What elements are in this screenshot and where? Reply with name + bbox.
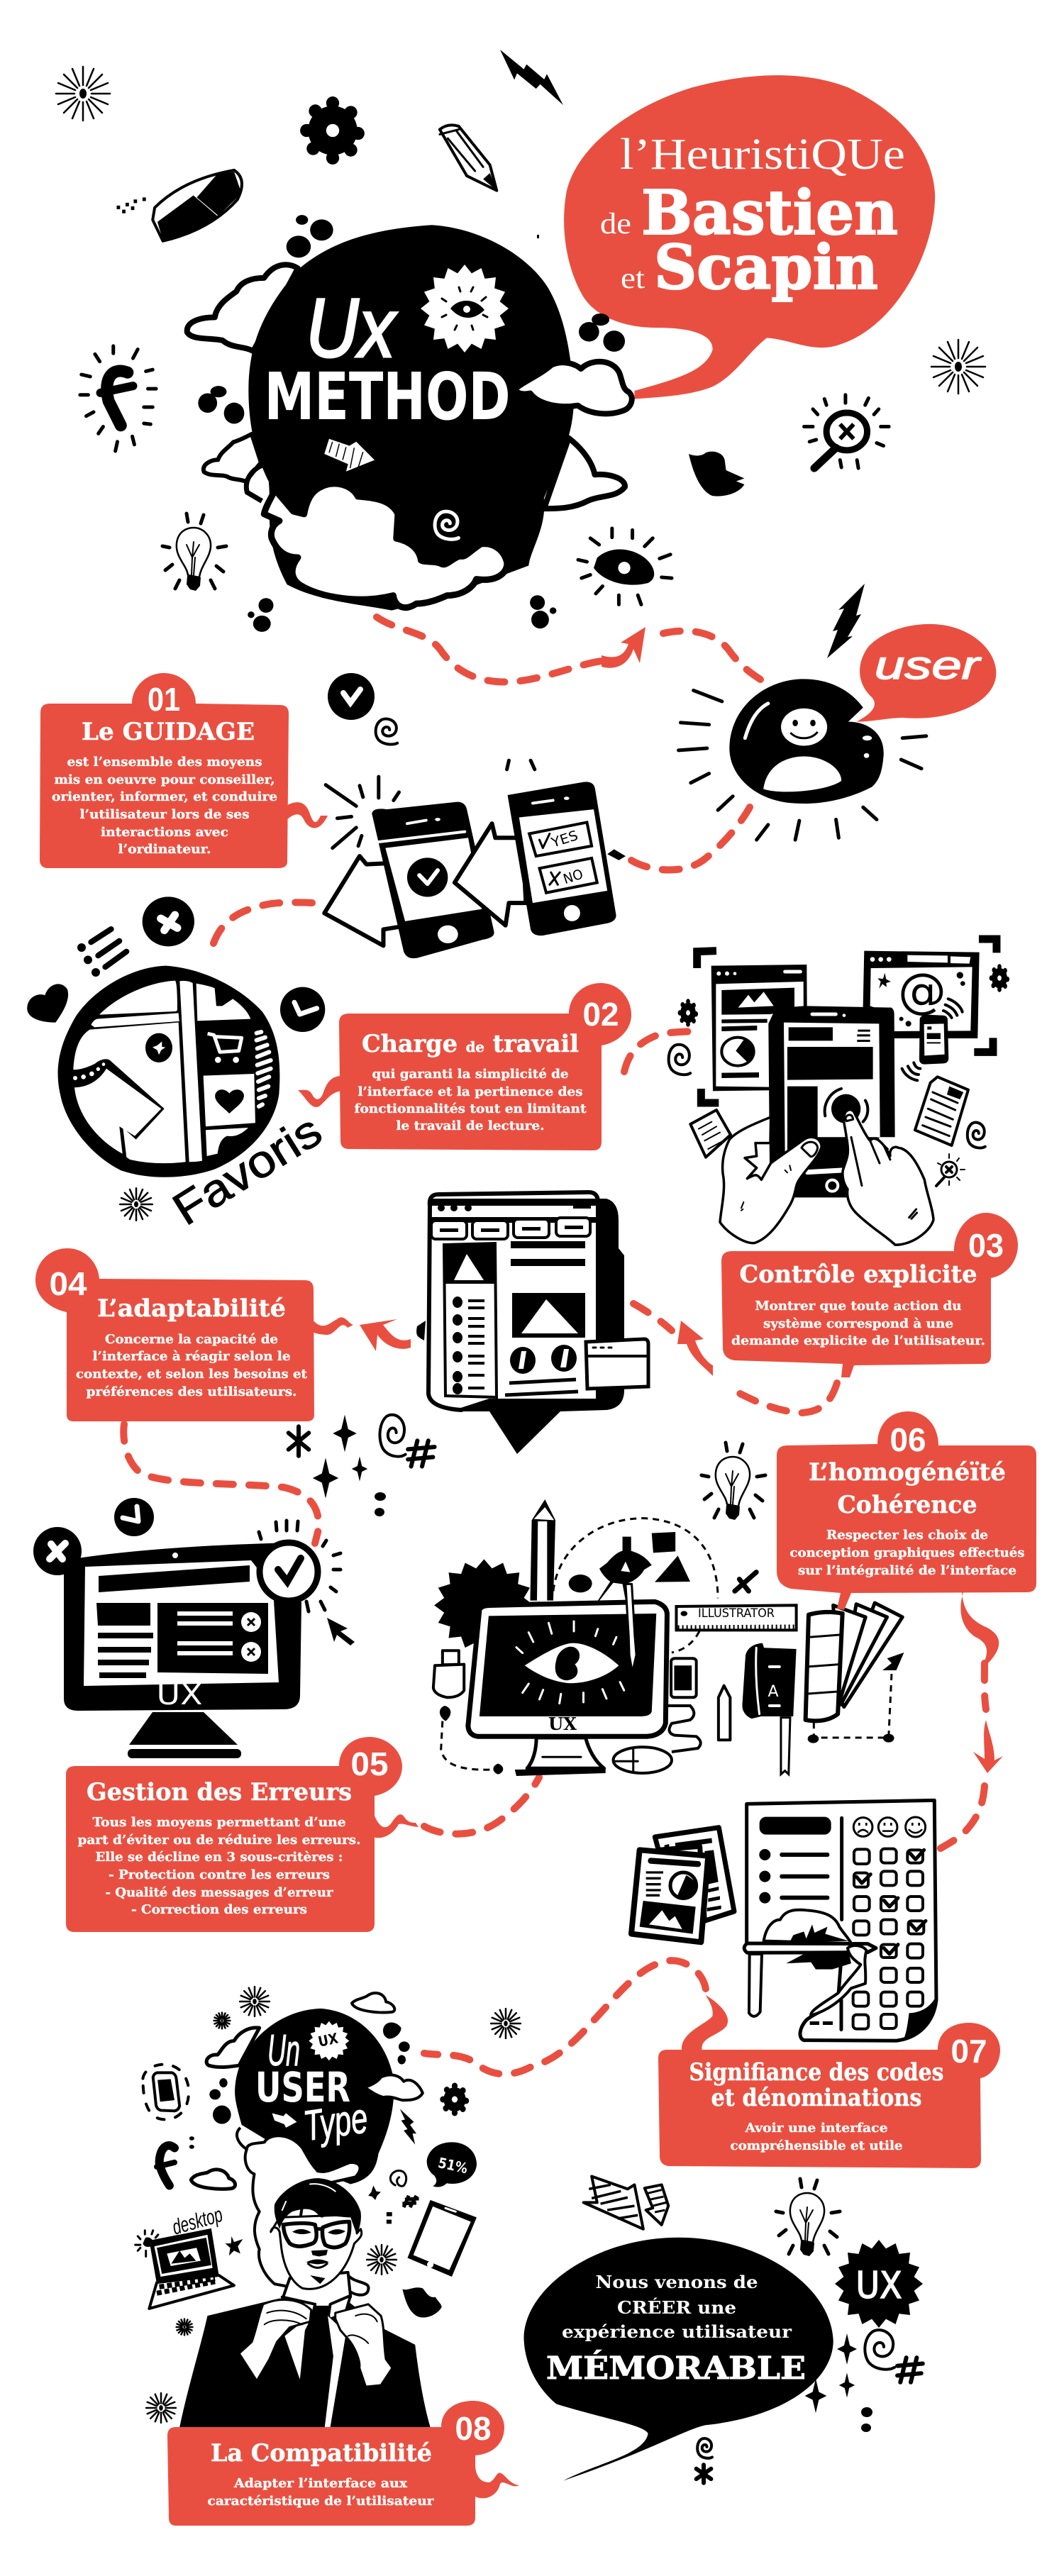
panel 04: adaptabilite: l’interface à réagir selon le [92, 1349, 291, 1364]
panel 06: homogeneite: 06 [890, 1421, 926, 1458]
dashed route: title to user [377, 617, 760, 682]
user type text: UX [316, 2029, 340, 2050]
panel 03: controle explicite: demande explicite de l’utilisateur. [731, 1333, 985, 1348]
dashed route and arrow: panel 06 to survey [941, 1663, 1003, 1848]
illustration: man adjusting tie [179, 2178, 431, 2427]
panel 01: le guidage: Le GUIDAGE [82, 718, 255, 746]
icon: small search [936, 1154, 965, 1186]
panel 05: gestion des erreurs: - Protection contre les erreurs [109, 1867, 330, 1882]
panel 01: le guidage: est l’ensemble des moyens [67, 755, 262, 770]
panel 01: le guidage: mis en oeuvre pour conseiller, [54, 772, 275, 787]
panel 05: gestion des erreurs: - Qualité des messages d’erreur [105, 1885, 333, 1900]
icon: hatch arrows [584, 2177, 668, 2229]
final black speech bubble: expérience utilisateur [562, 2321, 792, 2342]
panel 03: controle explicite [721, 1213, 1018, 1377]
user speech bubble [856, 624, 996, 722]
title cloud: bottom [264, 484, 507, 608]
panel 01: le guidage [40, 673, 328, 868]
white spiral on balloon [435, 511, 458, 539]
panel 02: charge de travail: l’interface et la pertinence des [358, 1084, 583, 1099]
panel 02: charge de travail [298, 983, 631, 1150]
icon: x circle [143, 896, 194, 946]
final black speech bubble: MÉMORABLE [546, 2349, 806, 2387]
panel 02: charge de travail: 02 [583, 996, 619, 1033]
user type text: Un [267, 2026, 300, 2075]
monitor label ux: UX [548, 1714, 577, 1734]
title speech bubble: Scapin [654, 232, 878, 304]
user type text [255, 2026, 370, 2150]
panel 04: adaptabilite [35, 1248, 353, 1421]
panel 07: signifiance: compréhensible et utile [731, 2138, 902, 2153]
panel 06: homogeneite: Respecter les choix de [826, 1528, 988, 1543]
ruler label illustrator: ILLUSTRATOR [698, 1606, 775, 1621]
icon: gear near user type [440, 2082, 469, 2116]
panel 01: le guidage: interactions avec [101, 825, 228, 840]
user character [679, 679, 926, 840]
panel 05: gestion des erreurs: part d’éviter ou de réduire les erreurs. [78, 1833, 360, 1848]
icons: scattered stars and spiral [289, 1415, 435, 1516]
hatch arrow on balloon [324, 439, 375, 472]
icon: spiral left of devices [669, 1045, 690, 1075]
panel 05: gestion des erreurs: Tous les moyens permettant d’une [92, 1815, 346, 1830]
panel 01: le guidage: l’ordinateur. [118, 842, 211, 857]
balloon left hook [246, 464, 265, 501]
illustration: survey sheet [631, 1800, 936, 2041]
icon: f logo [80, 346, 156, 451]
book label A: A [767, 1683, 779, 1701]
small dash [537, 235, 539, 238]
eye burst on balloon [421, 265, 509, 352]
user type text: USER [255, 2063, 350, 2111]
panel 01: le guidage: l’utilisateur lors de ses [79, 807, 250, 822]
illustration: devices and hands [690, 939, 997, 1245]
panel 06: homogeneite: sur l’intégralité de l’interface [798, 1563, 1016, 1578]
illustration: designer desk with monitor [433, 1499, 904, 1776]
small bursts around user type [146, 1987, 521, 2423]
illustration: monitor with error form: UX [156, 1679, 203, 1711]
icon: bird [689, 452, 744, 496]
icon: check circle [328, 673, 375, 720]
panel 02: charge de travail: le travail de lecture. [396, 1118, 545, 1133]
icon: gear right of devices [990, 964, 1009, 992]
illustration: two phones [324, 760, 626, 958]
dashed route and arrow: window to panel 04 [360, 1319, 411, 1351]
icon: bulb top [162, 513, 226, 591]
dashed route: panel 07 to user type [424, 1960, 706, 2074]
phone label NO: NO [561, 867, 585, 887]
panel 08: compatibilite: caractéristique de l’utilisateur [207, 2494, 434, 2509]
panel 01: le guidage: 01 [148, 681, 180, 718]
handwritten label: favoris: Favoris [164, 1104, 331, 1235]
panel 03: controle explicite: système correspond à une [763, 1316, 953, 1331]
label: ux on burst: UX [855, 2265, 902, 2307]
title speech bubble: Bastien [641, 177, 898, 249]
title cloud: right [515, 362, 632, 413]
balloon with UX method title [246, 225, 632, 611]
user type text: Type [301, 2094, 370, 2150]
icon: heart [27, 984, 68, 1023]
panel 05: gestion des erreurs: - Correction des erreurs [131, 1902, 307, 1917]
dots: paw clusters [198, 215, 625, 632]
panel 07: signifiance: Signifiance des codes [689, 2058, 943, 2087]
label: 51 percent: 51% [436, 2154, 469, 2177]
illustration: favorites magnifier [58, 966, 279, 1177]
icon: top lightning [500, 50, 563, 105]
icons around user type [135, 2023, 477, 2318]
icon: eraser pie [117, 170, 242, 241]
panel 08: compatibilite [167, 2401, 519, 2526]
dashed route: panel 04 to monitor [123, 1424, 318, 1543]
panel 05: gestion des erreurs [66, 1737, 419, 1932]
panel 07: signifiance: et dénominations [711, 2084, 922, 2112]
icon: gear [300, 96, 365, 165]
title speech bubble: l’HeuristiQUe [620, 131, 905, 179]
illustration: web window speech bubble [416, 1192, 648, 1454]
panel 02: charge de travail: Charge de travail [362, 1030, 579, 1058]
icons around final bubble [697, 2240, 923, 2483]
panel 06: homogeneite: L’homogénéïté [809, 1458, 1006, 1487]
icon: search [804, 395, 889, 468]
balloon clouds behind [187, 265, 625, 509]
icon: eye [578, 528, 672, 604]
panel 08: compatibilite: 08 [455, 2410, 491, 2447]
dashed route: phones to favorites [214, 902, 312, 943]
at sign: @ [898, 963, 946, 1019]
panel 05: gestion des erreurs: Gestion des Erreurs [87, 1778, 352, 1806]
label: desktop: desktop [170, 2203, 226, 2240]
panel 01: le guidage: orienter, informer, et conduire [52, 789, 277, 804]
icon: small burst [120, 1188, 153, 1221]
panel 06: homogeneite: conception graphiques effectués [790, 1545, 1024, 1560]
panel 07: signifiance: 07 [951, 2033, 987, 2070]
icon: top left burst [56, 67, 110, 121]
panel 08: compatibilite: La Compatibilité [211, 2439, 432, 2467]
icon: right burst [931, 340, 985, 394]
icon: pencil [440, 125, 497, 191]
title speech bubble: de [600, 208, 631, 240]
panel 07: signifiance: Avoir une interface [744, 2121, 888, 2136]
title speech bubble [564, 75, 935, 399]
panel 04: adaptabilite: contexte, et selon les besoins et [76, 1367, 308, 1382]
title text METHOD: METHOD [264, 359, 511, 435]
panel 03: controle explicite: Contrôle explicite [739, 1260, 977, 1289]
panel 04: adaptabilite: 04 [50, 1265, 87, 1302]
panel 07: signifiance [658, 1995, 1000, 2168]
icon: list lines [77, 929, 126, 977]
panel 04: adaptabilite: L’adaptabilité [97, 1294, 286, 1323]
panel 08: compatibilite: Adapter l’interface aux [233, 2476, 407, 2491]
title speech bubble: et [621, 262, 645, 295]
panel 04: adaptabilite: préférences des utilisateurs. [87, 1384, 297, 1399]
panel 06: homogeneite [777, 1411, 1036, 1663]
panel 03: controle explicite: Montrer que toute action du [755, 1299, 962, 1314]
panel 03: controle explicite: 03 [968, 1227, 1004, 1264]
illustration: monitor with error form [33, 1498, 355, 1758]
title text Ux: Ux [306, 282, 397, 375]
dashed route: panel 02 to devices [624, 1031, 692, 1072]
panel 02: charge de travail: qui garanti la simplicité de [372, 1067, 569, 1082]
icon: gear left of devices [678, 999, 698, 1027]
icon: spiral right of devices [968, 1123, 985, 1148]
icon: lightning by user [827, 584, 865, 658]
dashed route and arrow: panel 03 to window [633, 1304, 837, 1413]
panel 05: gestion des erreurs: 05 [350, 1745, 389, 1782]
user type balloon [191, 1993, 423, 2287]
final black speech bubble [523, 2238, 833, 2481]
user speech bubble: user [875, 643, 982, 687]
panel 04: adaptabilite: Concerne la capacité de [105, 1332, 278, 1347]
panel 06: homogeneite: Cohérence [837, 1491, 977, 1519]
icon: clock circle [280, 987, 325, 1032]
panel 05: gestion des erreurs: Elle se décline en 3 sous-critères : [95, 1850, 343, 1865]
panel 02: charge de travail: fonctionnalités tout en limitant [355, 1101, 587, 1116]
final black speech bubble: CRÉER une [617, 2297, 736, 2318]
icon: bulb near panel 06 [702, 1443, 765, 1520]
icon: spiral near phones [376, 719, 397, 745]
final black speech bubble: Nous venons de [596, 2272, 758, 2292]
dashed route: user to phones [631, 807, 750, 870]
icon: bulb bottom [776, 2179, 840, 2256]
dashed route: panel 05 to designer monitor [424, 1777, 539, 1834]
phone label YES: YES [549, 828, 580, 851]
